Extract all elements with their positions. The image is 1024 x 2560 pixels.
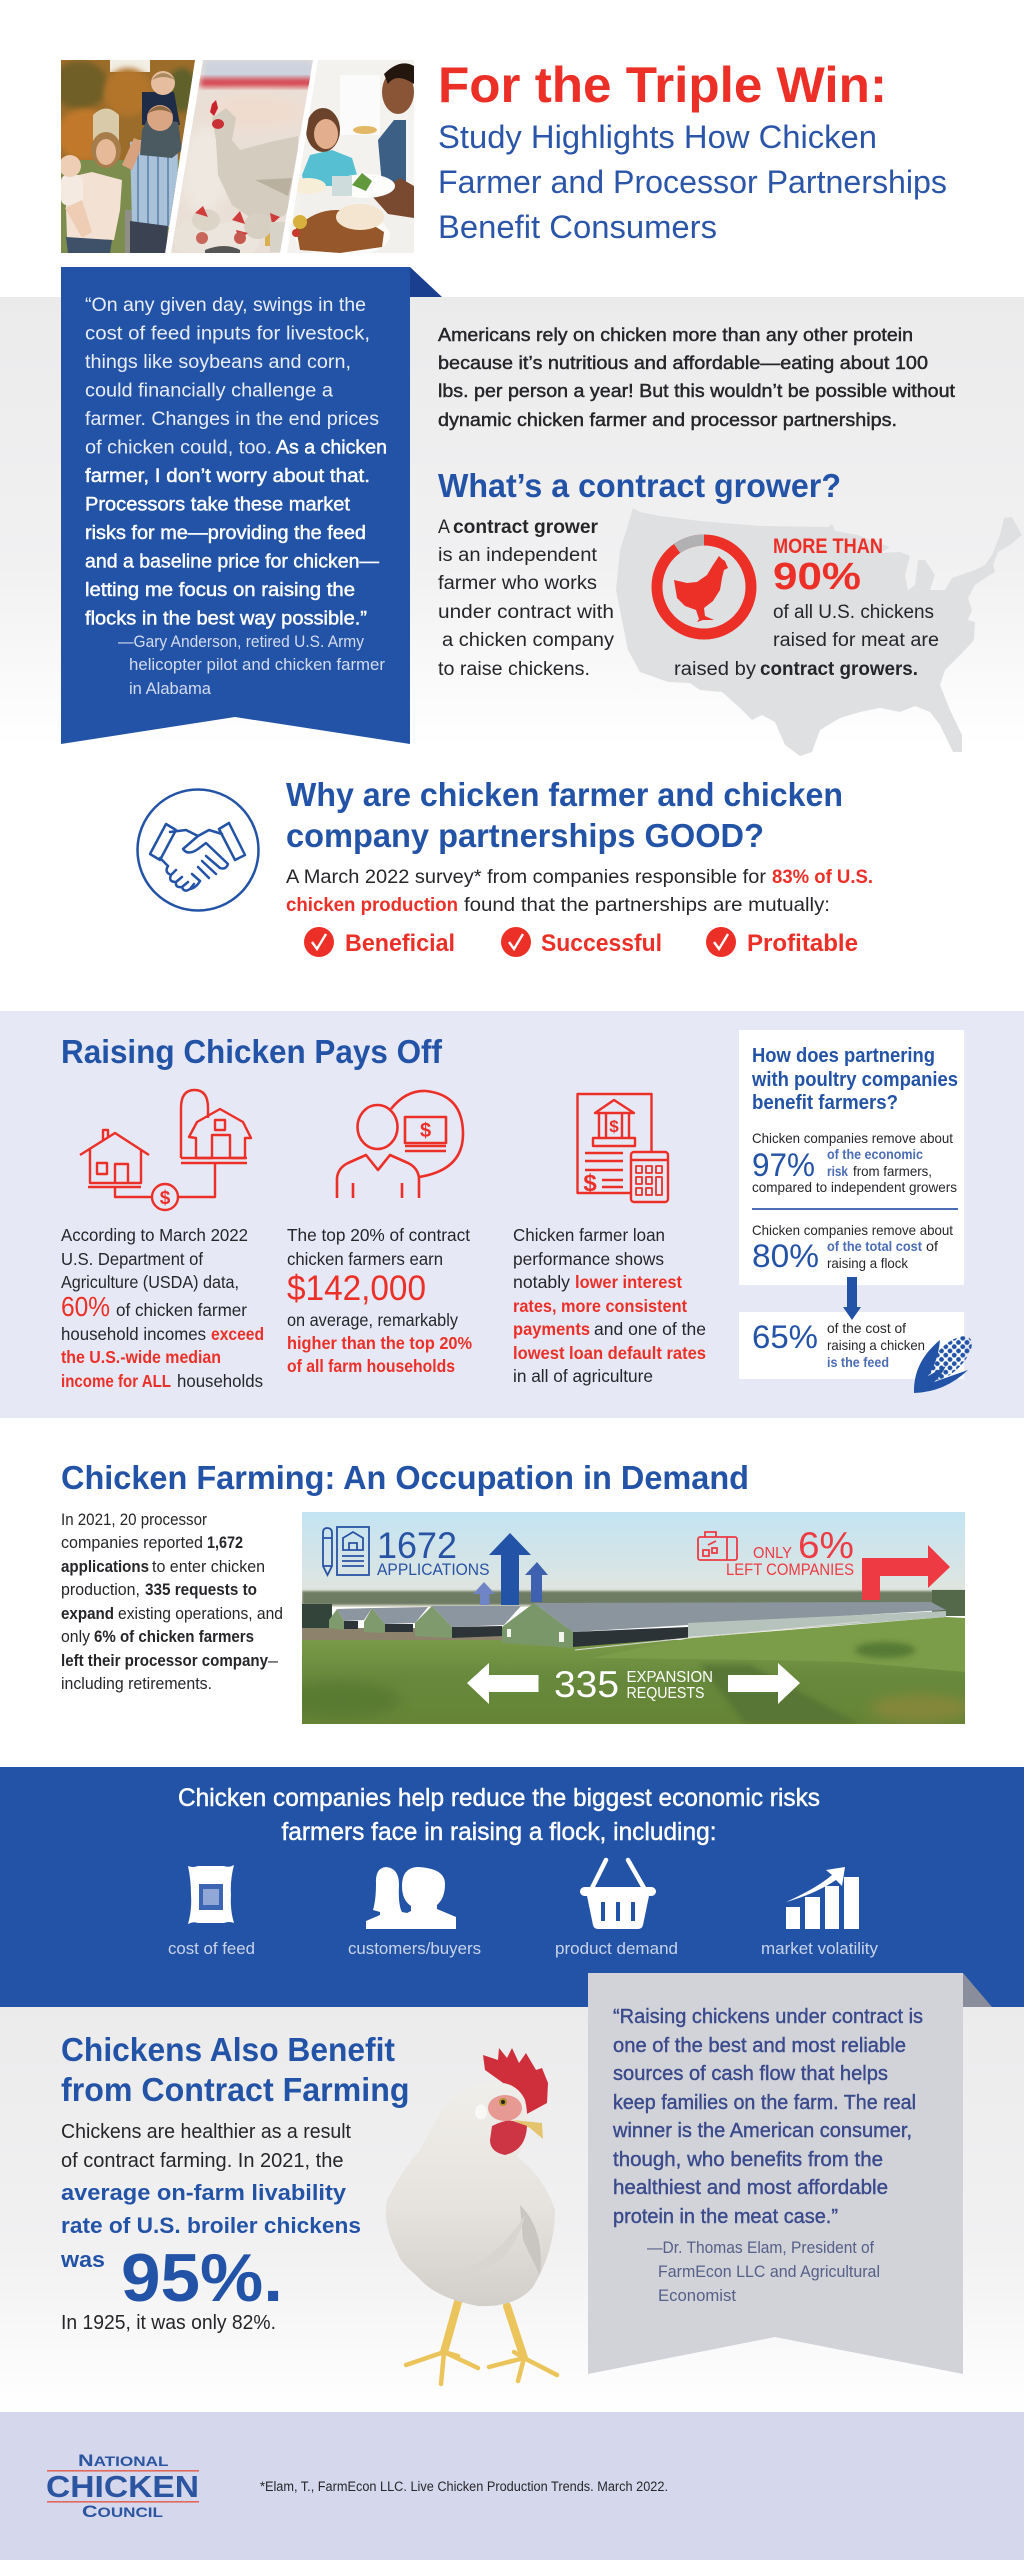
intro paragraph: Americans rely on chicken more than any other protein <box>438 324 913 345</box>
text: occupation in demand: expand <box>61 1604 114 1623</box>
icon: market volatility chart <box>761 1867 879 1958</box>
text column: top farmer earnings: $142,000 <box>287 1269 426 1308</box>
quote text: one of the best and most reliable <box>613 2034 906 2057</box>
text: survey description: found that the partnerships are mutually: <box>464 894 830 916</box>
heading: biggest economic risks <box>178 1784 820 1846</box>
quote text: and a baseline price for chicken— <box>85 552 379 572</box>
intro paragraph: because it’s nutritious and affordable—eating about 100 <box>438 352 928 373</box>
quote text: “Raising chickens under contract is <box>613 2005 923 2028</box>
quote text: risks for me—providing the feed <box>85 523 366 544</box>
heading: how does partnering <box>751 1045 958 1114</box>
item: successful <box>501 927 662 957</box>
text: contract grower definition: is an independent <box>438 545 598 566</box>
icon: person with money <box>337 1091 463 1198</box>
text: occupation in demand: existing operations, and <box>118 1604 283 1623</box>
photo: chickens in barn <box>170 60 315 258</box>
hen face <box>488 2095 522 2121</box>
text column: loan performance: lower interest <box>575 1272 682 1292</box>
text: occupation in demand: companies reported <box>61 1533 203 1552</box>
arrow: left white <box>467 1663 538 1704</box>
hen legs and feet <box>406 2302 557 2384</box>
stat: more than 90 percent: raised for meat are <box>773 630 939 651</box>
stat: 80 percent: of the total cost <box>827 1238 922 1254</box>
text: occupation in demand: — <box>268 1651 278 1670</box>
text column: household income: U.S. Department of <box>61 1249 203 1269</box>
text: contract grower definition: a chicken company <box>442 630 615 651</box>
stat: 1672 applications: 1672 <box>377 1525 457 1566</box>
quote attribution: in Alabama <box>129 680 212 698</box>
text: occupation in demand: 1,672 <box>207 1533 243 1552</box>
text column: top farmer earnings: chicken farmers earn <box>287 1249 443 1269</box>
text column: household income: household incomes <box>61 1324 206 1344</box>
label: cost of feed: cost of feed <box>168 1940 255 1958</box>
panel: raising chicken pays off background <box>0 1011 1024 1418</box>
quote text: farmer, I don’t worry about that. <box>85 466 370 487</box>
text: occupation in demand: 6% of chicken farmers <box>94 1627 254 1646</box>
heading: how does partnering: benefit farmers? <box>752 1092 898 1114</box>
text column: top farmer earnings: on average, remarkably <box>287 1310 458 1330</box>
logo: National Chicken Council: COUNCIL <box>82 2502 163 2521</box>
text: occupation in demand: only <box>61 1627 90 1646</box>
text: contract grower definition: contract grower <box>453 517 599 538</box>
text column: household income: the U.S.-wide median <box>61 1347 221 1367</box>
text column: household income <box>61 1225 264 1391</box>
intro paragraph <box>438 324 955 430</box>
label: market volatility: market volatility <box>761 1940 879 1958</box>
chart: 90 percent ring with hen <box>657 540 751 634</box>
text: livability rate <box>60 2121 361 2334</box>
intro paragraph: lbs. per person a year! But this wouldn’t be possible without <box>438 380 955 401</box>
text column: top farmer earnings: The top 20% of contract <box>287 1225 470 1245</box>
text: livability rate: of contract farming. In 2021, the <box>61 2150 344 2172</box>
text: survey description: chicken production <box>286 894 458 916</box>
stat: 80 percent: 80% <box>752 1238 819 1274</box>
text column: top farmer earnings: of all farm households <box>287 1356 455 1376</box>
text column: top farmer earnings <box>287 1225 472 1376</box>
text column: household income: Agriculture (USDA) data, <box>61 1272 239 1292</box>
stat: more than 90 percent: MORE THAN <box>773 535 883 558</box>
quote text: winner is the American consumer, <box>612 2119 912 2142</box>
icon: handshake in circle <box>138 790 258 910</box>
map: United States silhouette <box>616 508 1022 756</box>
quote text: keep families on the farm. The real <box>613 2091 916 2114</box>
item: beneficial: Beneficial <box>345 930 455 957</box>
footnote: *Elam, T., FarmEcon LLC. Live Chicken Production Trends. March 2022. <box>260 2479 668 2494</box>
stat: 97 percent: compared to independent growers <box>752 1179 957 1195</box>
quote text: protein in the meat case.” <box>613 2205 838 2228</box>
heading: chicken farming in demand: Chicken Farming: An Occupation in Demand <box>61 1459 749 1496</box>
stat: 1672 applications <box>323 1525 490 1579</box>
text: survey description: 83% of U.S. <box>772 866 873 888</box>
label: product demand: product demand <box>555 1940 678 1958</box>
text column: loan performance: notably <box>513 1272 570 1292</box>
item: successful: Successful <box>541 930 662 957</box>
stat: more than 90 percent: raised by <box>674 659 757 680</box>
text column: loan performance <box>513 1225 706 1386</box>
stat: only 6 percent left companies: 6% <box>798 1525 854 1566</box>
text: survey description <box>286 866 873 916</box>
logo: National Chicken Council: NATIONAL <box>78 2451 168 2470</box>
heading: biggest economic risks: Chicken companies help reduce the biggest economic risks <box>178 1784 820 1812</box>
stat: more than 90 percent <box>674 535 939 680</box>
arrow: right white <box>728 1663 800 1704</box>
quote text: sources of cash flow that helps <box>613 2062 888 2085</box>
hen comb <box>483 2048 548 2115</box>
heading: how does partnering: with poultry companies <box>751 1069 958 1091</box>
text: livability rate: rate of U.S. broiler chickens <box>61 2213 361 2238</box>
text: livability rate: In 1925, it was only 82%. <box>61 2312 276 2334</box>
text column: loan performance: Chicken farmer loan <box>513 1225 665 1245</box>
text: occupation in demand: including retirements. <box>61 1674 212 1693</box>
stat: 97 percent: Chicken companies remove about <box>752 1130 953 1146</box>
quote attribution: —Dr. Thomas Elam, President of <box>647 2239 874 2257</box>
stat: 335 expansion requests <box>467 1663 800 1705</box>
checklist: beneficial, successful, profitable <box>304 927 858 957</box>
icon: product demand basket <box>555 1860 678 1958</box>
icon: bank document and calculator: $ <box>609 1117 619 1136</box>
item: beneficial <box>304 927 455 957</box>
subtitle: Farmer and Processor Partnerships <box>438 164 947 200</box>
stat: 335 expansion requests: REQUESTS <box>626 1685 704 1702</box>
text: livability rate: Chickens are healthier as a result <box>61 2121 351 2143</box>
stat: 65 percent: is the feed <box>827 1354 889 1370</box>
logo: National Chicken Council <box>46 2451 199 2521</box>
text column: household income: exceed <box>211 1324 264 1344</box>
stat: more than 90 percent: of all U.S. chickens <box>773 602 934 623</box>
stat: 335 expansion requests: EXPANSION <box>626 1669 713 1686</box>
text: occupation in demand: to enter chicken <box>152 1557 265 1576</box>
text: occupation in demand: left their processor company <box>61 1651 268 1670</box>
text column: loan performance: performance shows <box>513 1249 664 1269</box>
text: contract grower definition: A <box>438 517 450 538</box>
text: occupation in demand: In 2021, 20 processor <box>61 1510 207 1529</box>
stat: only 6 percent left companies <box>698 1525 854 1579</box>
stat: 80 percent: Chicken companies remove about <box>752 1222 953 1238</box>
text column: loan performance: rates, more consistent <box>513 1296 687 1316</box>
text: contract grower definition <box>438 517 615 680</box>
text: occupation in demand: production, <box>61 1580 140 1599</box>
photo: chicken houses with stats <box>280 1512 970 1724</box>
quote text: letting me focus on raising the <box>85 580 355 601</box>
text column: household income: 60% <box>61 1291 110 1322</box>
heading: chickens also benefit <box>61 2031 410 2108</box>
heading: why partnerships are good: Why are chicken farmer and chicken <box>286 776 843 813</box>
icon: house, barn and dollar coin: $ <box>160 1188 171 1209</box>
text: occupation in demand <box>61 1510 283 1693</box>
panel: economic risks blue band <box>0 1767 1024 2007</box>
stat: 1672 applications: APPLICATIONS <box>377 1560 490 1579</box>
icon: hen <box>674 556 728 622</box>
illustration: white hen <box>386 2048 557 2384</box>
icon: cost of feed bag <box>168 1865 255 1958</box>
stat: 65 percent: of the cost of <box>827 1320 906 1336</box>
text: contract grower definition: under contract with <box>438 602 614 623</box>
heading: For the Triple Win: For the Triple Win: <box>438 57 887 113</box>
quote text <box>612 2005 923 2228</box>
heading: chickens also benefit: Chickens Also Benefit <box>61 2031 395 2068</box>
quote text: Processors take these market <box>85 494 351 516</box>
heading: What's a contract grower: What’s a contract grower? <box>438 467 841 504</box>
stat: only 6 percent left companies: LEFT COMPANIES <box>726 1560 854 1579</box>
text column: top farmer earnings: higher than the top 20% <box>287 1333 472 1353</box>
stat: 65 percent: 65% <box>752 1319 818 1355</box>
quote text <box>85 295 387 630</box>
subtitle: Benefit Consumers <box>438 209 717 245</box>
stat: 80 percent: raising a flock <box>827 1255 909 1271</box>
stat: 80 percent <box>752 1222 953 1274</box>
logo: National Chicken Council: CHICKEN <box>46 2469 199 2504</box>
text column: household income: households <box>177 1371 263 1391</box>
quote attribution: FarmEcon LLC and Agricultural <box>658 2263 880 2281</box>
heading: why partnerships are good <box>286 776 843 854</box>
stat: only 6 percent left companies: ONLY <box>753 1545 792 1562</box>
photo: farm family <box>52 60 198 253</box>
far shed <box>337 1608 372 1621</box>
title <box>438 57 947 245</box>
arrows: upward applications <box>473 1533 548 1605</box>
icon: bank document and calculator <box>578 1094 668 1202</box>
text column: household income: According to March 2022 <box>61 1225 248 1245</box>
icon: person with money: $ <box>420 1120 431 1142</box>
quote attribution <box>647 2239 880 2305</box>
icon: bank document and calculator: $ <box>583 1170 597 1197</box>
panel: intro gray background <box>0 297 1024 747</box>
panel: footer band <box>0 2412 1024 2560</box>
stat: more than 90 percent: contract growers. <box>760 659 918 680</box>
item: profitable <box>706 927 858 957</box>
text: livability rate: was <box>60 2247 105 2272</box>
arrow: left companies <box>862 1545 950 1600</box>
item: profitable: Profitable <box>747 930 858 957</box>
stat: 65 percent <box>752 1319 925 1370</box>
panel: economist quote ribbon <box>588 1973 992 2374</box>
text column: household income: of chicken farmer <box>116 1300 247 1320</box>
text: contract grower definition: to raise chickens. <box>438 659 590 680</box>
quote text: could financially challenge a <box>85 380 333 402</box>
main shed <box>534 1602 946 1632</box>
quote text: cost of feed inputs for livestock, <box>85 324 370 344</box>
stat: 97 percent <box>752 1130 957 1195</box>
quote text: though, who benefits from the <box>613 2148 883 2171</box>
text column: loan performance: payments <box>513 1319 590 1339</box>
text column: household income: income for ALL <box>61 1371 171 1391</box>
stat: 80 percent: of <box>926 1238 938 1254</box>
subtitle: Study Highlights How Chicken <box>438 119 877 155</box>
text: livability rate: 95%. <box>121 2240 283 2316</box>
icon: suitcase <box>698 1532 737 1560</box>
arrow: down to feed cost <box>843 1277 861 1320</box>
stat: 97 percent: of the economic <box>827 1146 923 1162</box>
panel: how partnering benefits farmers <box>739 1030 979 1393</box>
quote text: healthiest and most affordable <box>613 2176 888 2199</box>
text column: loan performance: in all of agriculture <box>513 1366 653 1386</box>
quote text: flocks in the best way possible.” <box>85 608 367 630</box>
text: occupation in demand: 335 requests to <box>145 1580 257 1599</box>
stat: more than 90 percent: 90% <box>773 556 861 598</box>
text: survey description: A March 2022 survey* from companies responsible for <box>286 866 767 888</box>
quote text: things like soybeans and corn, <box>85 352 351 373</box>
panel: chickens benefit gray background <box>0 2007 1024 2412</box>
heading: raising chicken pays off: Raising Chicken Pays Off <box>61 1033 443 1070</box>
quote text: farmer. Changes in the end prices <box>85 409 379 430</box>
intro paragraph: dynamic chicken farmer and processor partnerships. <box>438 409 897 430</box>
icon: house, barn and dollar coin <box>80 1090 251 1210</box>
label: customers/buyers: customers/buyers <box>348 1940 481 1958</box>
text column: loan performance: and one of the <box>594 1319 706 1339</box>
stat: 97 percent: from farmers, <box>853 1163 932 1179</box>
stat: 97 percent: 97% <box>752 1147 815 1183</box>
panel: farmer quote ribbon <box>61 267 442 744</box>
heading: chickens also benefit: from Contract Farming <box>61 2071 410 2108</box>
quote attribution: —Gary Anderson, retired U.S. Army <box>118 633 365 651</box>
text: occupation in demand: applications <box>61 1557 149 1576</box>
quote attribution: Economist <box>658 2287 736 2305</box>
photo background: farm <box>280 1512 970 1724</box>
quote attribution: helicopter pilot and chicken farmer <box>129 656 386 674</box>
hen body <box>386 2082 555 2306</box>
stat: 97 percent: risk <box>827 1163 848 1179</box>
text: livability rate: average on-farm livability <box>61 2180 347 2205</box>
photo collage <box>52 60 415 258</box>
stat: 335 expansion requests: 335 <box>554 1664 619 1705</box>
text column: loan performance: lowest loan default rates <box>513 1343 706 1363</box>
heading: biggest economic risks: farmers face in raising a flock, including: <box>282 1818 716 1846</box>
subtitle <box>438 119 947 245</box>
stat: 65 percent: raising a chicken <box>827 1337 925 1353</box>
quote text: As a chicken <box>276 438 387 458</box>
quote text: of chicken could, too. <box>85 438 272 458</box>
photo: family meal <box>285 60 415 257</box>
heading: why partnerships are good: company partnerships GOOD? <box>286 817 764 854</box>
heading: how does partnering: How does partnering <box>752 1045 935 1067</box>
quote text: “On any given day, swings in the <box>85 295 366 316</box>
icon: pencil and application <box>323 1527 369 1575</box>
text: contract grower definition: farmer who works <box>438 573 597 594</box>
icon: corn <box>914 1329 979 1393</box>
icon: customers and buyers <box>348 1867 481 1958</box>
quote attribution <box>118 633 386 698</box>
